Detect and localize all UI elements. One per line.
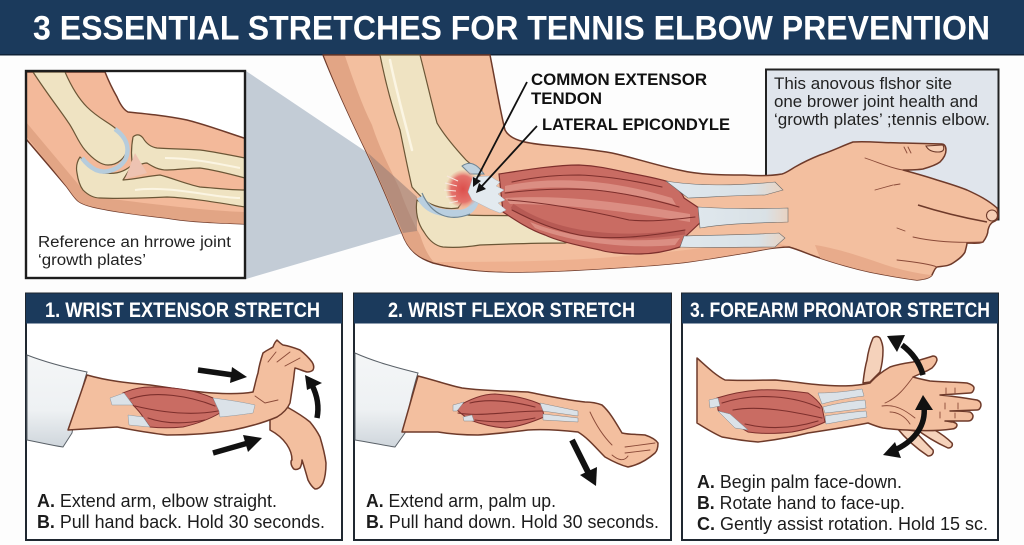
humerus bone (380, 55, 482, 209)
panel 3 steps: B. Rotate hand to face-up. (697, 493, 905, 513)
label: common extensor tendon: COMMON EXTENSOR (531, 70, 707, 89)
panel 3 muscle (717, 390, 825, 434)
panel 1 steps (37, 491, 325, 532)
panel 1 heading: 1. WRIST EXTENSOR STRETCH (45, 299, 320, 322)
bone highlight (390, 60, 412, 150)
wedge overlay on arm (368, 153, 417, 233)
description box: This anovous flshor site (774, 75, 952, 93)
arrow: curved wrist bend (305, 375, 322, 418)
upper cartilage (462, 163, 484, 174)
panel 1 heading (26, 294, 342, 324)
panel 2 heading: 2. WRIST FLEXOR STRETCH (388, 299, 635, 322)
panel 1 muscle (123, 387, 220, 428)
joint cartilage (420, 197, 476, 213)
label: lateral epicondyle: LATERAL EPICONDYLE (542, 115, 730, 134)
panel 3 steps: A. Begin palm face-down. (697, 472, 902, 492)
panel 3 tendons (709, 389, 867, 430)
panel 1 lower hand (270, 407, 326, 489)
panel 2 tendons (453, 402, 578, 422)
shaded arm edges (324, 56, 434, 262)
panel: forearm pronator stretch (682, 294, 998, 540)
tendon fan at elbow (468, 176, 506, 213)
panel 2 forearm and hand (402, 376, 658, 467)
panel 3 steps: C. Gently assist rotation. Hold 15 sc. (697, 514, 988, 534)
forearm muscle (499, 165, 703, 254)
panel 3 rotated fingers and thumb (863, 336, 952, 456)
title banner (0, 0, 1024, 56)
muscle highlights and fibres (505, 175, 695, 246)
lower arm bone (416, 200, 575, 247)
wrist tendons (666, 181, 783, 198)
panel 2 sleeve (355, 353, 418, 447)
inset: elbow joint: Reference an hrrowe joint (38, 234, 232, 251)
panel 3 steps (697, 472, 988, 534)
arrow: rotate up (887, 335, 923, 375)
panel 1 steps: B. Pull hand back. Hold 30 seconds. (37, 512, 325, 532)
description box: ‘growth plates’ ;tennis elbow. (774, 111, 990, 129)
panel 2 steps (366, 491, 659, 532)
description box: one brower joint health and (774, 93, 978, 111)
main arm anatomy illustration (323, 55, 998, 280)
panel 1 hand creases (255, 352, 300, 403)
panel 1 steps: A. Extend arm, elbow straight. (37, 491, 277, 511)
arm and hand skin (323, 55, 998, 280)
zoom wedge connecting inset to elbow (246, 71, 403, 279)
panel 1 tendons (110, 393, 255, 427)
inset: elbow joint (20, 71, 250, 278)
panel 2 steps: B. Pull hand down. Hold 30 seconds. (366, 512, 659, 532)
lower forearm shading (434, 240, 789, 272)
panel 2 steps: A. Extend arm, palm up. (366, 491, 556, 511)
panel 2 muscle (455, 394, 544, 428)
label: lateral epicondyle (476, 115, 730, 193)
panel: wrist flexor stretch (354, 294, 671, 540)
panel 2 heading (354, 294, 671, 324)
panel: wrist extensor stretch (26, 294, 342, 540)
label: common extensor tendon: TENDON (531, 89, 602, 108)
finger gap (918, 205, 987, 222)
panel 1 forearm and hand (68, 340, 314, 435)
inset: elbow joint: ‘growth plates’ (38, 252, 146, 269)
label: common extensor tendon (473, 70, 707, 187)
hand creases (865, 147, 983, 267)
arrow: rotate down double-headed (883, 395, 933, 458)
red tendon streaks (444, 176, 458, 203)
arrow: pull down (572, 440, 597, 486)
arrow: push right (198, 367, 247, 383)
nails (926, 145, 944, 152)
inflamed tendon origin (446, 170, 480, 208)
description box (766, 70, 998, 220)
panel 2 hand creases (590, 412, 655, 460)
panel 3 forearm and hand (697, 356, 981, 442)
panel 1 sleeve (27, 355, 87, 447)
panel 3 palm creases (882, 377, 958, 424)
arrow: push up-right (213, 435, 262, 453)
lower hand shading (815, 245, 932, 280)
